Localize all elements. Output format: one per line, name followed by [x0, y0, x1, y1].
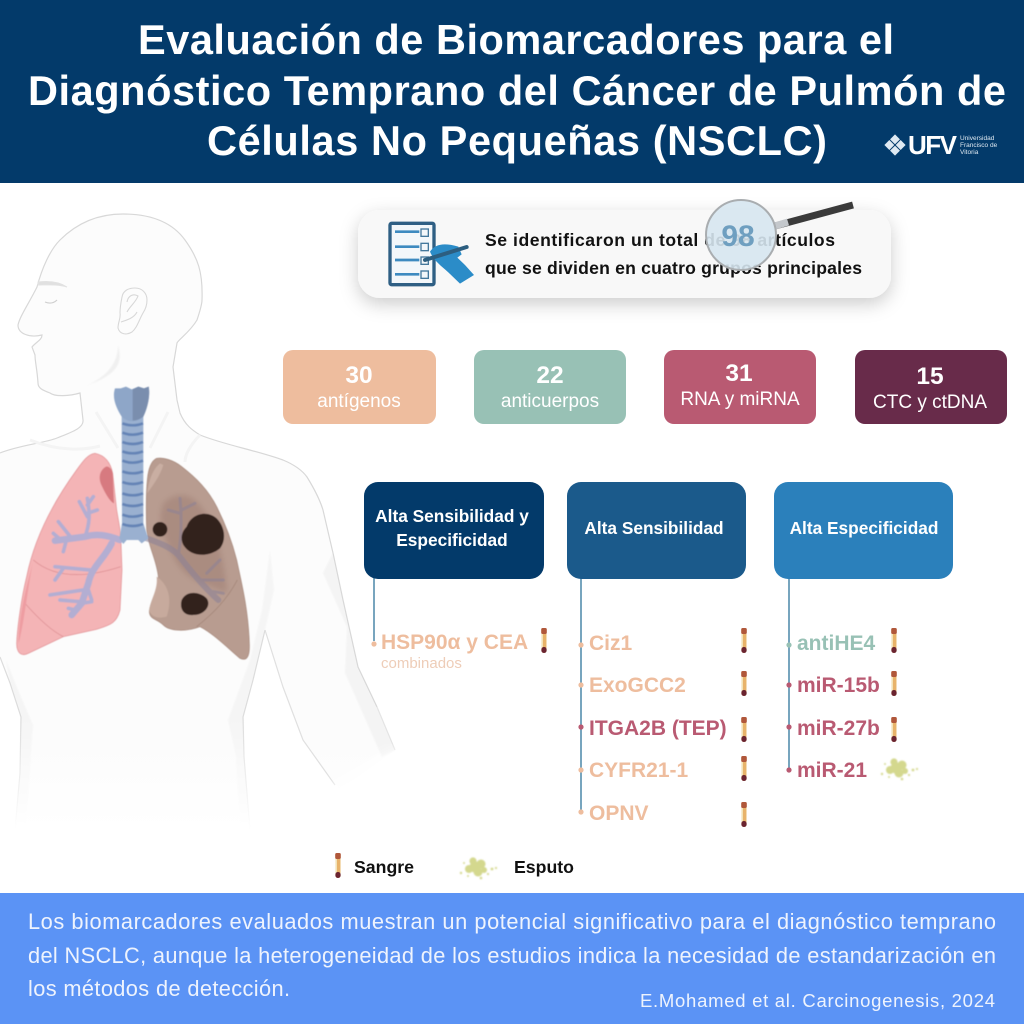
card: antígenos: [283, 350, 436, 424]
item: Ciz1: Ciz1: [589, 632, 632, 655]
card: RNA y miRNA: [664, 350, 816, 424]
item: miR-15b: miR-15b: [797, 674, 880, 697]
item: miR-27b: miR-27b: [797, 717, 880, 740]
text: summary: [485, 230, 862, 278]
heading box: [774, 482, 953, 579]
illustration: human body with lungs: [0, 214, 405, 830]
card: CTC y ctDNA: 15: [916, 363, 944, 390]
item: miR-21: [786, 758, 918, 782]
item: Ciz1: [578, 628, 747, 655]
conclusion text: [28, 909, 996, 1001]
citation: E.Mohamed et al. Carcinogenesis, 2024: [640, 990, 995, 1011]
item: CYFR21-1: [578, 756, 747, 782]
title: Células No Pequeñas (NSCLC): [207, 117, 827, 164]
conclusion text: Los biomarcadores evaluados muestran un potencial significativo para el diagnóstico temprano: [28, 909, 996, 934]
bronchi: [50, 497, 120, 615]
logo: UFV: Vitoria: [960, 149, 979, 156]
header band: [0, 0, 1024, 183]
text: summary: que se dividen en cuatro grupos principales: [485, 258, 862, 278]
item: OPNV: OPNV: [589, 802, 649, 825]
arm fade: [335, 760, 405, 800]
panel: total articles: [358, 200, 891, 298]
icon: magnifier with 98: [706, 200, 853, 270]
title: Diagnóstico Temprano del Cáncer de Pulmón de: [28, 67, 1006, 114]
heading box: Especificidad: [396, 530, 508, 550]
card: CTC y ctDNA: CTC y ctDNA: [873, 392, 987, 413]
logo: UFV: Universidad: [960, 135, 995, 142]
card: antígenos: antígenos: [317, 391, 401, 412]
item: OPNV: [578, 802, 747, 827]
conclusion text: del NSCLC, aunque la heterogeneidad de los estudios indica la necesidad de estandarización en: [28, 943, 996, 968]
item: miR-15b: [786, 671, 897, 697]
card: CTC y ctDNA: [855, 350, 1007, 424]
text: summary: Se identificaron un total de 98 artículos: [485, 230, 835, 250]
heading box: Alta Sensibilidad: [584, 518, 724, 538]
heading box: [364, 482, 544, 579]
icon: checklist with hand: [390, 223, 474, 285]
lung: diseased: [146, 458, 249, 659]
conclusion text: los métodos de detección.: [28, 976, 290, 1001]
item: antiHE4: [786, 628, 897, 655]
item: HSP90α y CEA: HSP90α y CEA: [381, 631, 528, 654]
title: Evaluación de Biomarcadores para el: [138, 16, 894, 63]
item: HSP90α y CEA: [371, 628, 547, 672]
card: RNA y miRNA: 31: [725, 360, 753, 387]
item: miR-21: miR-21: [797, 759, 867, 782]
heading box: [567, 482, 746, 579]
legend: Esputo: [460, 857, 574, 879]
legend: Sangre: Sangre: [354, 857, 414, 877]
footer band: [0, 893, 1024, 1024]
card: antígenos: 30: [345, 362, 373, 389]
logo: UFV: Francisco de: [960, 142, 998, 149]
item: antiHE4: antiHE4: [797, 632, 876, 655]
legend: Sangre: [335, 853, 414, 878]
icon: magnifier with 98: 98: [721, 220, 755, 253]
trachea: [114, 387, 149, 544]
title: [28, 16, 1006, 164]
column: Alta Sensibilidad y Especificidad: [364, 482, 547, 672]
body outline: [0, 214, 405, 830]
item: CYFR21-1: CYFR21-1: [589, 759, 689, 782]
eye, brow, ear: [38, 282, 67, 287]
heading box: Alta Especificidad: [790, 518, 938, 538]
item: ITGA2B (TEP): ITGA2B (TEP): [589, 717, 727, 740]
column: Alta Sensibilidad: [567, 482, 747, 827]
stat cards: [283, 350, 1007, 424]
item: HSP90α y CEA: combinados: [381, 655, 462, 672]
item: miR-27b: [786, 717, 897, 742]
logo: UFV: UFV: [908, 130, 958, 160]
shading bands: [6, 345, 395, 830]
legend: [335, 853, 574, 879]
column: Alta Especificidad: [774, 482, 953, 782]
card: RNA y miRNA: RNA y miRNA: [680, 389, 800, 410]
card: anticuerpos: 22: [536, 362, 564, 389]
legend: Esputo: Esputo: [514, 857, 574, 877]
card: anticuerpos: [474, 350, 626, 424]
card: anticuerpos: anticuerpos: [501, 391, 599, 412]
item: ExoGCC2: [578, 671, 747, 697]
logo: UFV: [884, 130, 998, 160]
heading box: Alta Sensibilidad y: [375, 506, 529, 526]
tumours: [153, 514, 224, 615]
item: ExoGCC2: ExoGCC2: [589, 674, 686, 697]
lung: healthy: [17, 453, 122, 655]
